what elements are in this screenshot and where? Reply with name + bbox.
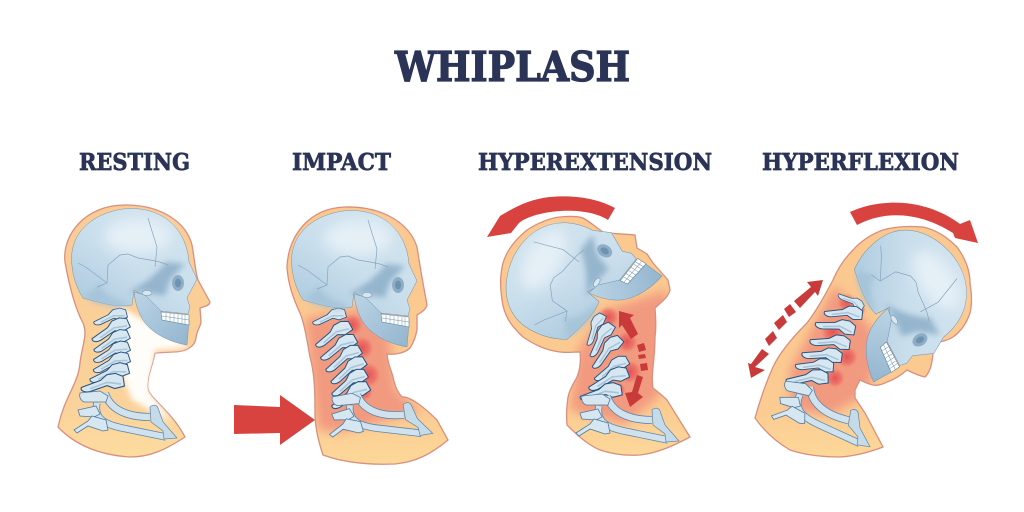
heading: hyperextension: HYPEREXTENSION xyxy=(478,149,712,176)
head contour xyxy=(501,216,690,455)
neck highlight xyxy=(118,305,190,422)
head outline xyxy=(287,207,448,464)
spine xyxy=(81,307,132,392)
spine xyxy=(578,311,631,401)
head outline xyxy=(501,216,690,455)
skull xyxy=(485,195,667,374)
panel: hyperextension xyxy=(500,216,691,456)
title: WHIPLASH xyxy=(394,43,630,91)
shoulder bones xyxy=(769,378,881,448)
panel: impact xyxy=(287,207,448,464)
heading: resting: RESTING xyxy=(79,149,190,176)
head outline xyxy=(755,226,972,457)
heading: impact: IMPACT xyxy=(292,149,391,176)
injury spots xyxy=(597,306,642,398)
spine xyxy=(311,307,372,410)
panel: resting xyxy=(58,205,210,457)
heading: hyperflexion: HYPERFLEXION xyxy=(762,149,959,176)
shoulder bones xyxy=(576,394,679,442)
inflamed neck xyxy=(790,285,885,415)
skull xyxy=(292,210,417,347)
arrow: dashed neck stretch xyxy=(619,311,648,407)
injury spots xyxy=(821,293,866,388)
arrow: impact xyxy=(234,395,315,445)
skull xyxy=(809,210,992,390)
head contour xyxy=(755,226,972,457)
inflamed neck xyxy=(570,290,668,425)
head outline xyxy=(58,205,210,457)
arrow: head moving forward xyxy=(850,203,978,243)
arrow: dashed back stretch xyxy=(748,280,823,378)
arrow: head moving backward xyxy=(487,196,615,237)
head contour xyxy=(287,207,448,464)
shoulder bones xyxy=(326,387,433,443)
panel: hyperflexion xyxy=(754,226,972,458)
spine xyxy=(786,287,866,387)
inflamed neck xyxy=(305,305,420,432)
injury spots xyxy=(341,314,381,401)
skull xyxy=(72,208,197,345)
shoulder bones xyxy=(74,391,177,439)
